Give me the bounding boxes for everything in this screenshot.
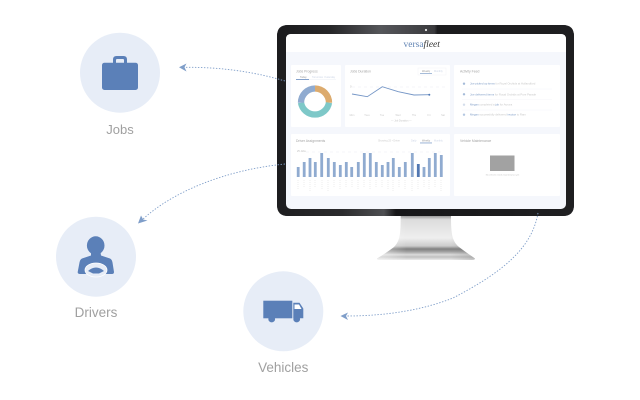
x axis labels <box>350 114 445 117</box>
x axis labels: Sat <box>441 114 445 117</box>
x axis labels: Thu <box>412 114 417 117</box>
bar labels <box>298 180 441 191</box>
feed row 2: Joe delivered items for Royal Orchids at Pure Parade <box>470 92 537 96</box>
x axis labels: Wed <box>395 114 401 117</box>
dashboard screen <box>286 34 566 209</box>
monitor stand <box>377 216 475 260</box>
arrow: monitor to vehicles <box>340 213 538 320</box>
icon: truck <box>263 301 303 322</box>
toggle: Weekly <box>422 70 431 73</box>
x axis labels: Mon <box>350 114 355 117</box>
x axis labels: Fri <box>428 114 431 117</box>
placeholder image <box>490 156 514 171</box>
line chart <box>352 87 445 97</box>
panel: jobs progress <box>291 65 341 127</box>
filters: Monthly <box>434 140 444 142</box>
arrow: monitor to jobs <box>179 64 285 81</box>
panel: vehicle maintenance <box>454 134 560 196</box>
tabs <box>296 76 336 80</box>
toggle: Monthly <box>434 70 444 73</box>
icon circle: jobs <box>80 33 160 113</box>
tabs: Yesterday <box>324 76 336 79</box>
icon: briefcase <box>102 56 138 90</box>
bar chart <box>297 153 443 177</box>
label: vehicles: Vehicles <box>258 360 309 375</box>
heading: Activity Feed <box>460 70 480 74</box>
x axis labels: Tues <box>364 114 370 117</box>
panel: jobs duration <box>345 65 450 127</box>
icon circle: vehicles <box>243 271 323 351</box>
heading: Vehicle Maintenance <box>460 139 491 143</box>
label: drivers: Drivers <box>75 305 118 320</box>
icon: driver at steering wheel <box>78 236 114 277</box>
heading: Jobs Progress <box>296 70 318 74</box>
camera <box>425 29 427 31</box>
panel: activity feed <box>454 65 560 127</box>
filters: Weekly <box>422 140 431 142</box>
toggle <box>418 68 446 75</box>
icon circle: drivers <box>56 217 136 297</box>
dashboard header <box>286 34 566 52</box>
feed row 1: Joe picked up items for Royal Orchids at Hollandford <box>470 82 536 86</box>
filters: Daily <box>411 140 417 142</box>
legend: — Job Duration — <box>391 120 412 122</box>
arrow: monitor to drivers <box>138 164 285 224</box>
feed row 3: Megan completed a job for Aurora <box>470 103 513 107</box>
filters <box>378 140 444 143</box>
logo: versafleet <box>404 39 440 50</box>
panel: driver assignments <box>291 134 450 196</box>
x axis labels: Tue <box>380 114 385 117</box>
y label: 0 <box>350 84 352 88</box>
tabs: Tomorrow <box>312 76 323 79</box>
empty message: No vehicle needs maintenance yet <box>486 174 520 176</box>
donut chart <box>301 88 329 115</box>
heading: Driver Assignments <box>296 139 326 143</box>
filters: Showing 25 • Driver <box>378 140 400 142</box>
y label: 25 Jobs <box>297 150 307 153</box>
tabs: Today <box>300 76 307 79</box>
feed row 4: Megan successfully delivered invoice to Ram <box>470 113 527 117</box>
monitor bezel <box>277 25 574 216</box>
label: jobs: Jobs <box>106 122 134 137</box>
heading: Jobs Duration <box>350 70 371 74</box>
